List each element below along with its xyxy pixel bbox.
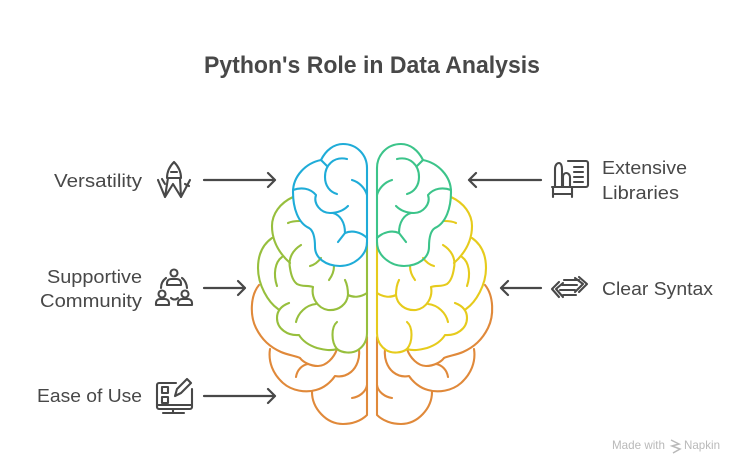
label: Clear Syntax: Clear Syntax	[602, 279, 713, 299]
arrow: Ease of Use to brain	[204, 389, 275, 403]
left blue lobe	[293, 144, 367, 266]
label: Versatility: Versatility	[54, 171, 142, 191]
label: Extensive Libraries: Extensive	[602, 158, 687, 178]
icon: syntax chevrons	[552, 277, 587, 297]
right yellow lobe	[377, 197, 486, 353]
brain diagram	[252, 144, 492, 424]
arrow: Clear Syntax to brain	[501, 281, 541, 295]
left orange lobe	[252, 285, 367, 424]
watermark: Made with Napkin	[612, 438, 720, 453]
label: Extensive Libraries	[602, 158, 687, 203]
left green lobe	[258, 197, 367, 353]
icon: monitor with pencil	[157, 379, 192, 413]
label: Supportive Community: Community	[40, 291, 142, 311]
watermark: Made with Napkin: Napkin	[684, 438, 720, 452]
arrow: Supportive Community to brain	[204, 281, 245, 295]
icon: drawing compass	[158, 162, 190, 197]
icon: community people	[156, 270, 192, 305]
arrow: Extensive Libraries to brain	[469, 173, 541, 187]
right green lobe	[377, 144, 451, 266]
right orange lobe	[377, 285, 492, 424]
label: Supportive Community	[40, 267, 142, 311]
arrow: Versatility to brain	[204, 173, 275, 187]
label: Ease of Use: Ease of Use	[37, 386, 142, 406]
icon: books and document	[552, 161, 588, 197]
label: Extensive Libraries: Libraries	[602, 183, 679, 203]
title: Python's Role in Data Analysis	[204, 52, 540, 79]
label: Supportive Community: Supportive	[47, 267, 142, 287]
watermark: Made with Napkin: Made with	[612, 438, 665, 452]
